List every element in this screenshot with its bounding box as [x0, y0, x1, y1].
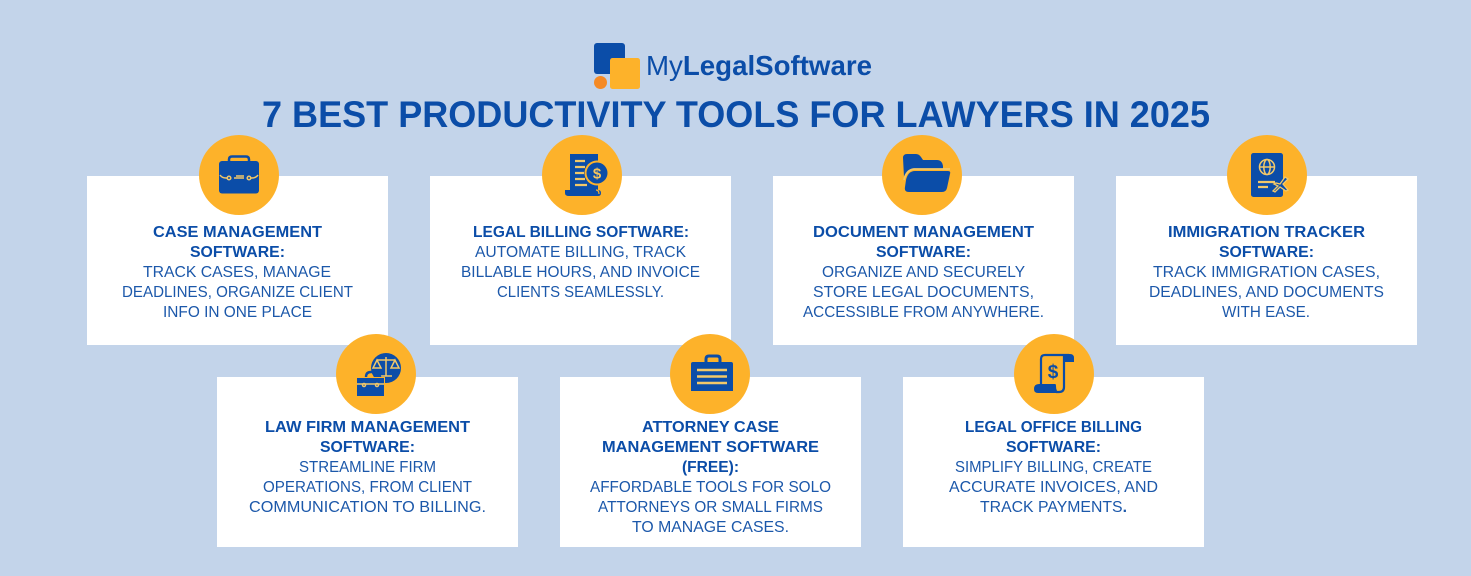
icon: folder	[882, 135, 962, 215]
heading	[153, 224, 322, 261]
description: ATTORNEYS OR SMALL FIRMS	[598, 499, 823, 516]
heading: SOFTWARE:	[320, 439, 415, 456]
description	[590, 479, 831, 536]
heading: (FREE):	[682, 459, 739, 476]
panel: legal office billing software	[903, 334, 1204, 547]
heading: LEGAL BILLING SOFTWARE:	[473, 224, 689, 241]
panel: attorney case management software	[560, 334, 861, 547]
icon: billing document: $	[593, 166, 602, 182]
description: TRACK CASES, MANAGE	[143, 264, 331, 281]
icon: billing document	[542, 135, 622, 215]
description: DEADLINES, ORGANIZE CLIENT	[122, 284, 354, 301]
description: OPERATIONS, FROM CLIENT	[263, 479, 473, 496]
heading: DOCUMENT MANAGEMENT	[813, 224, 1034, 241]
description: TRACK PAYMENTS.	[980, 499, 1127, 516]
description: COMMUNICATION TO BILLING.	[249, 499, 486, 516]
description: BILLABLE HOURS, AND INVOICE	[461, 264, 700, 281]
logo wordmark: MyLegalSoftware	[646, 50, 872, 81]
panel: immigration tracker software	[1116, 135, 1417, 345]
heading: SOFTWARE:	[1219, 244, 1314, 261]
description: ACCESSIBLE FROM ANYWHERE.	[803, 304, 1044, 321]
heading	[1168, 224, 1365, 261]
description: ACCURATE INVOICES, AND	[949, 479, 1158, 496]
description: WITH EASE.	[1222, 304, 1310, 321]
icon: passport	[1227, 135, 1307, 215]
title: 7 BEST PRODUCTIVITY TOOLS FOR LAWYERS IN 2025	[262, 94, 1210, 135]
description: STORE LEGAL DOCUMENTS,	[813, 284, 1034, 301]
panel: document management software	[773, 135, 1074, 345]
panel: legal billing software	[430, 135, 731, 345]
heading: ATTORNEY CASE	[642, 419, 779, 436]
heading	[602, 419, 819, 476]
description: AUTOMATE BILLING, TRACK	[475, 244, 687, 261]
heading: SOFTWARE:	[1006, 439, 1101, 456]
description: INFO IN ONE PLACE	[163, 304, 312, 321]
heading	[813, 224, 1034, 261]
heading: LAW FIRM MANAGEMENT	[265, 419, 470, 436]
heading: MANAGEMENT SOFTWARE	[602, 439, 819, 456]
description: AFFORDABLE TOOLS FOR SOLO	[590, 479, 831, 496]
heading: CASE MANAGEMENT	[153, 224, 322, 241]
heading	[265, 419, 470, 456]
icon: invoice scroll: $	[1048, 362, 1059, 383]
description: TO MANAGE CASES.	[632, 519, 789, 536]
description	[249, 459, 486, 516]
description	[1149, 264, 1384, 321]
panel: law firm management software	[217, 334, 518, 547]
description: SIMPLIFY BILLING, CREATE	[955, 459, 1152, 476]
description: ORGANIZE AND SECURELY	[822, 264, 1025, 281]
description: TRACK IMMIGRATION CASES,	[1153, 264, 1380, 281]
heading: LEGAL OFFICE BILLING	[965, 419, 1142, 436]
icon: invoice scroll	[1014, 334, 1094, 414]
description	[949, 459, 1158, 516]
heading: SOFTWARE:	[876, 244, 971, 261]
description	[803, 264, 1044, 321]
icon: briefcase	[199, 135, 279, 215]
description: DEADLINES, AND DOCUMENTS	[1149, 284, 1384, 301]
logo mark	[594, 43, 640, 89]
description: CLIENTS SEAMLESSLY.	[497, 284, 664, 301]
icon: scales and briefcase	[336, 334, 416, 414]
heading: IMMIGRATION TRACKER	[1168, 224, 1365, 241]
logo	[594, 43, 872, 89]
heading: SOFTWARE:	[190, 244, 285, 261]
icon: document briefcase	[670, 334, 750, 414]
description	[461, 244, 700, 301]
panel: case management software	[87, 135, 388, 345]
heading	[965, 419, 1142, 456]
description	[122, 264, 354, 321]
description: STREAMLINE FIRM	[299, 459, 436, 476]
